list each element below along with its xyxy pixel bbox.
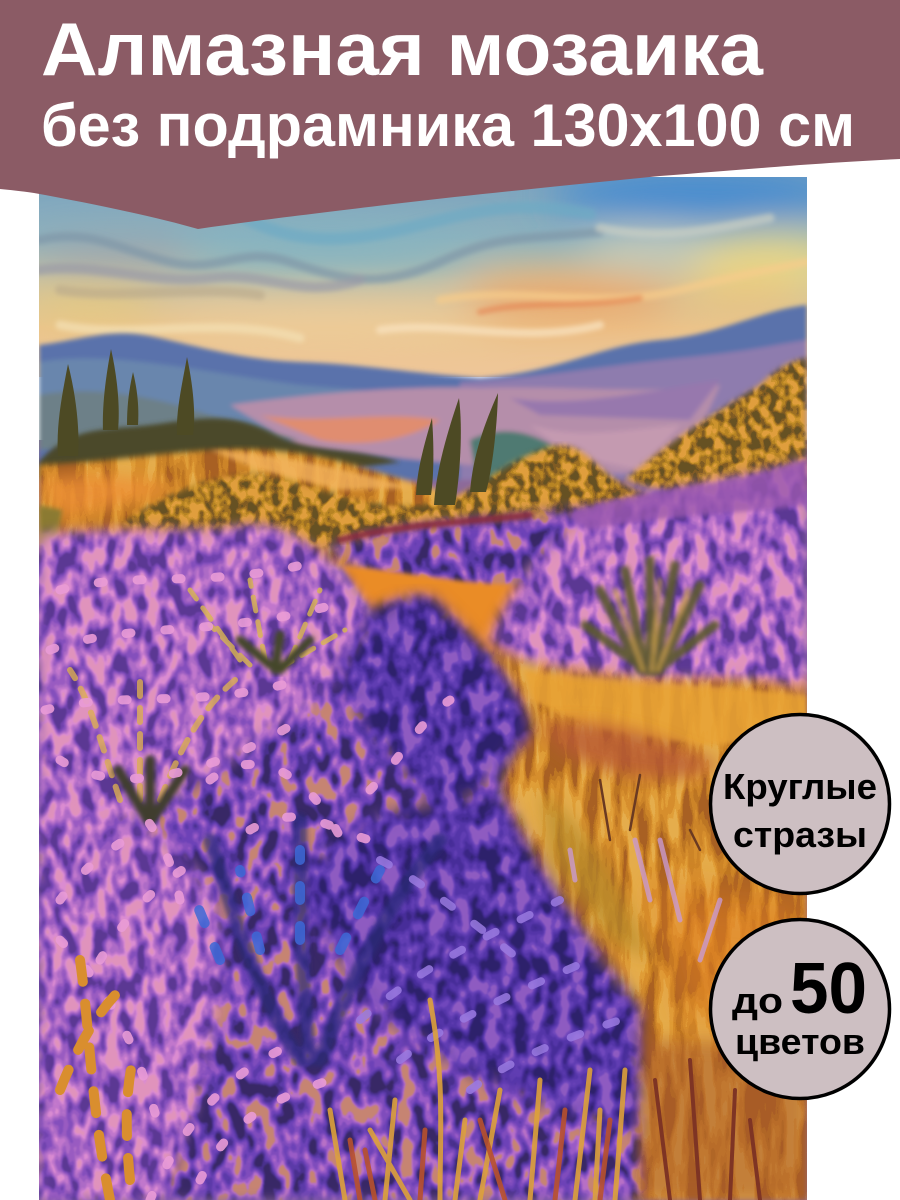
dark tree line on left hill bbox=[39, 418, 400, 478]
foreground grasses bbox=[330, 1000, 625, 1200]
sky brush swirls bbox=[39, 207, 807, 338]
sky bbox=[39, 177, 807, 377]
right lavender clump bbox=[488, 458, 807, 690]
distant mountains bbox=[39, 305, 807, 500]
badge: up to 50 colours: цветов bbox=[735, 1021, 865, 1062]
cypress trees bbox=[58, 349, 498, 505]
lavender highlights and stems bbox=[45, 560, 760, 1200]
dark red bank and middle lavender rows bbox=[322, 498, 622, 587]
title: Алмазная мозаика bbox=[41, 7, 764, 91]
orange path and ochre meadow bbox=[340, 565, 807, 1200]
pink lavender dabs bbox=[45, 560, 450, 1200]
bush stems bbox=[585, 560, 715, 672]
badge: up to 50 colours bbox=[710, 920, 890, 1098]
orange meadow bbox=[39, 445, 440, 570]
autumn bushes: right hill and centre bbox=[39, 358, 807, 550]
badge: round rhinestones bbox=[710, 714, 890, 894]
badge: up to 50 colours: до bbox=[732, 980, 783, 1021]
badge: round rhinestones: Круглые bbox=[723, 766, 877, 807]
ground base colour, avoids gaps between layers bbox=[39, 440, 807, 1200]
badge: up to 50 colours: 50 bbox=[790, 949, 867, 1029]
painting: lavender field landscape bbox=[20, 171, 850, 1200]
badge: round rhinestones: стразы bbox=[733, 814, 867, 855]
subtitle: без подрамника 130х100 см bbox=[41, 92, 855, 159]
main lavender field bbox=[39, 525, 640, 1200]
header banner bbox=[0, 0, 900, 229]
